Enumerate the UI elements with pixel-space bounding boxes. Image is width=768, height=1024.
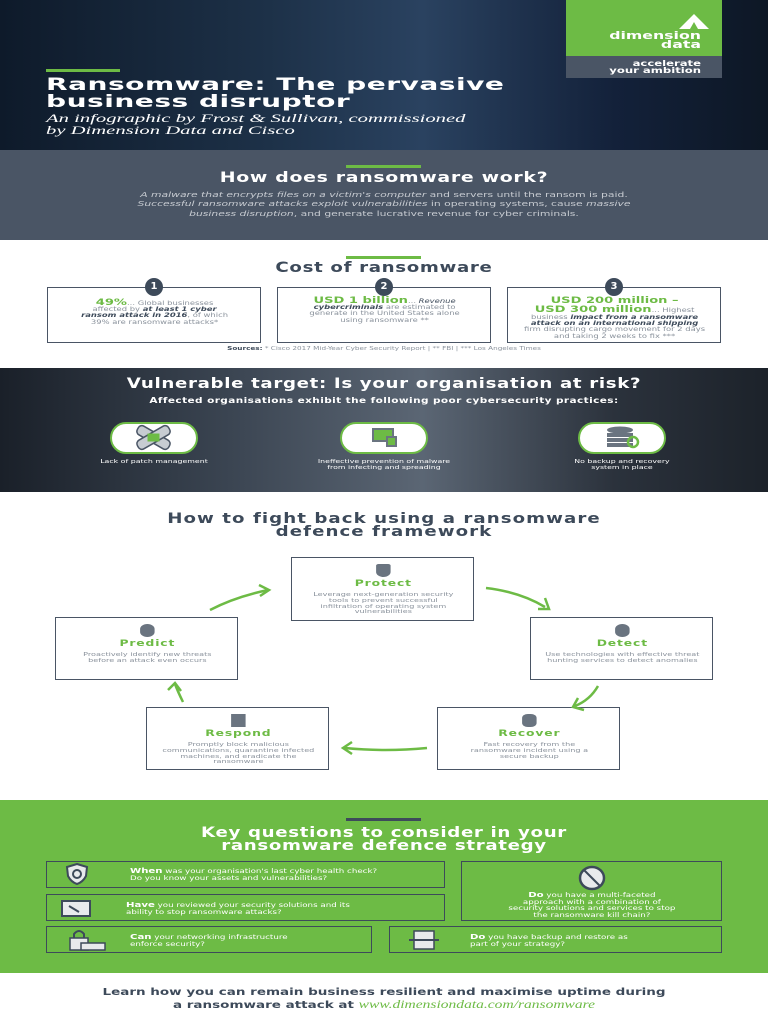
question: when: When was your organisation's last cyber health check? <box>130 867 377 875</box>
card: protect <box>291 557 474 621</box>
question: can: Can your networking infrastructure <box>130 933 288 941</box>
label <box>574 459 670 471</box>
sources: Sources: * Cisco 2017 Mid-Year Cyber Security Report | ** FBI | *** Los Angeles Times <box>227 346 541 352</box>
card: protect: Leverage next-generation security tools to prevent successful infiltration of operating system vulnerabilities <box>313 592 453 615</box>
heading: Key questions to consider in your <box>201 825 567 841</box>
label: system in place <box>591 465 653 471</box>
card 3: and taking 2 weeks to fix *** <box>554 334 675 340</box>
section: how does ransomware work <box>0 150 768 240</box>
question: can: enforce security? <box>130 940 205 948</box>
card 2: using ransomware ** <box>340 318 429 324</box>
heading: defence framework <box>276 524 492 540</box>
section: cost of ransomware: 3 <box>611 281 617 292</box>
card 2: generate in the United States alone <box>309 311 460 317</box>
card: respond: Promptly block malicious communications, quarantine infected machines, and eradicate the ransomware <box>162 742 314 765</box>
body text: A malware that encrypts files on a victim's computer and servers until the ransom is paid. Successful ransomware attacks exploit vulnerabilities in operating systems, cause massive business disruption, and generate lucrative revenue for cyber criminals. <box>138 190 630 218</box>
header photo banner <box>0 0 768 150</box>
card: predict: Predict <box>119 639 175 649</box>
card: respond: Respond <box>205 729 271 739</box>
title: business disruptor <box>46 92 350 112</box>
subtitle: by Dimension Data and Cisco <box>46 122 295 136</box>
question: do multi-faceted <box>461 861 722 921</box>
icon: patch <box>110 422 198 454</box>
heading <box>201 825 567 854</box>
card 2: USD 1 billion... Revenue <box>313 296 456 306</box>
logo block: your ambition <box>609 66 701 75</box>
card: detect: Use technologies with effective threat hunting services to detect anomalies <box>545 652 699 664</box>
footer call to action: a ransomware attack at www.dimensiondata.com/ransomware <box>173 999 595 1011</box>
section: key questions <box>0 800 768 973</box>
question: backup: Do you have backup and restore as <box>470 933 628 941</box>
logo block: dimension <box>609 30 701 42</box>
card: recover: Fast recovery from the ransomware incident using a secure backup <box>471 742 588 760</box>
title: Ransomware: The pervasive <box>46 75 504 95</box>
card 1 <box>47 287 261 343</box>
card: predict <box>55 617 238 680</box>
card: recover: Recover <box>498 729 560 739</box>
heading: How to fight back using a ransomware <box>167 511 601 527</box>
subtitle: An infographic by Frost & Sullivan, commissioned <box>46 111 465 125</box>
card 1: 49%... Global businesses <box>96 298 213 308</box>
question: can <box>46 926 372 953</box>
question: backup: part of your strategy? <box>470 940 565 948</box>
card 1: affected by at least 1 cyber <box>92 307 217 313</box>
footer call to action <box>102 987 666 1011</box>
logo block: accelerate <box>633 59 701 68</box>
subheading: Affected organisations exhibit the following poor cybersecurity practices: <box>149 396 619 405</box>
heading: ransomware defence strategy <box>221 838 547 854</box>
card 3: USD 300 million... Highest <box>535 305 694 315</box>
question: do multi-faceted: the ransomware kill chain? <box>533 912 650 918</box>
card 3: firm disrupting cargo movement for 2 days <box>524 327 705 333</box>
icon: logo triangle <box>679 14 709 29</box>
section: cost of ransomware: 1 <box>151 281 157 292</box>
question: do multi-faceted: Do you have a multi-faceted <box>528 891 656 899</box>
card: detect: Detect <box>597 639 648 649</box>
subtitle <box>44 111 466 136</box>
label <box>318 459 450 471</box>
card 2 <box>277 287 491 343</box>
label: No backup and recovery <box>574 459 670 465</box>
card: detect <box>530 617 713 680</box>
card: respond <box>146 707 329 770</box>
label: Ineffective prevention of malware <box>318 459 450 465</box>
card 3: attack on an international shipping <box>531 321 698 327</box>
card 3: USD 200 million – <box>551 296 679 306</box>
card: recover <box>437 707 620 770</box>
card 3: business impact from a ransomware <box>531 315 698 321</box>
card 3 <box>507 287 721 343</box>
question: when <box>46 861 445 888</box>
heading <box>167 511 601 540</box>
section: vulnerable target <box>0 368 768 492</box>
title <box>46 75 504 112</box>
card: predict: Proactively identify new threats before an attack even occurs <box>83 652 212 664</box>
icon: database backup <box>578 422 666 454</box>
footer call to action: Learn how you can remain business resilient and maximise uptime during <box>102 987 666 998</box>
heading: How does ransomware work? <box>220 170 548 186</box>
card 1: ransom attack in 2016, of which <box>81 313 228 319</box>
question: have <box>46 894 445 921</box>
heading: Vulnerable target: Is your organisation at risk? <box>127 376 641 392</box>
logo block: data <box>661 38 701 50</box>
section: cost of ransomware: 2 <box>381 281 387 292</box>
card 1: 39% are ransomware attacks* <box>91 320 218 326</box>
card: protect: Protect <box>355 579 412 589</box>
heading: Cost of ransomware <box>275 260 493 276</box>
arrows: cycle <box>167 584 599 755</box>
question: backup <box>389 926 722 953</box>
icon: malware monitor <box>340 422 428 454</box>
question: have: ability to stop ransomware attacks? <box>126 908 282 916</box>
question: when: Do you know your assets and vulnerabilities? <box>130 874 327 882</box>
section: cost of ransomware <box>47 256 721 352</box>
question: do multi-faceted: approach with a combination of <box>523 898 661 906</box>
section: defence framework <box>55 511 713 770</box>
question: have: Have you reviewed your security solutions and its <box>126 901 350 909</box>
question: do multi-faceted: security solutions and services to stop <box>508 905 675 912</box>
label: from infecting and spreading <box>327 465 441 471</box>
card 2: cybercriminals are estimated to <box>314 305 456 311</box>
label: Lack of patch management <box>100 459 208 465</box>
logo block <box>566 0 722 78</box>
